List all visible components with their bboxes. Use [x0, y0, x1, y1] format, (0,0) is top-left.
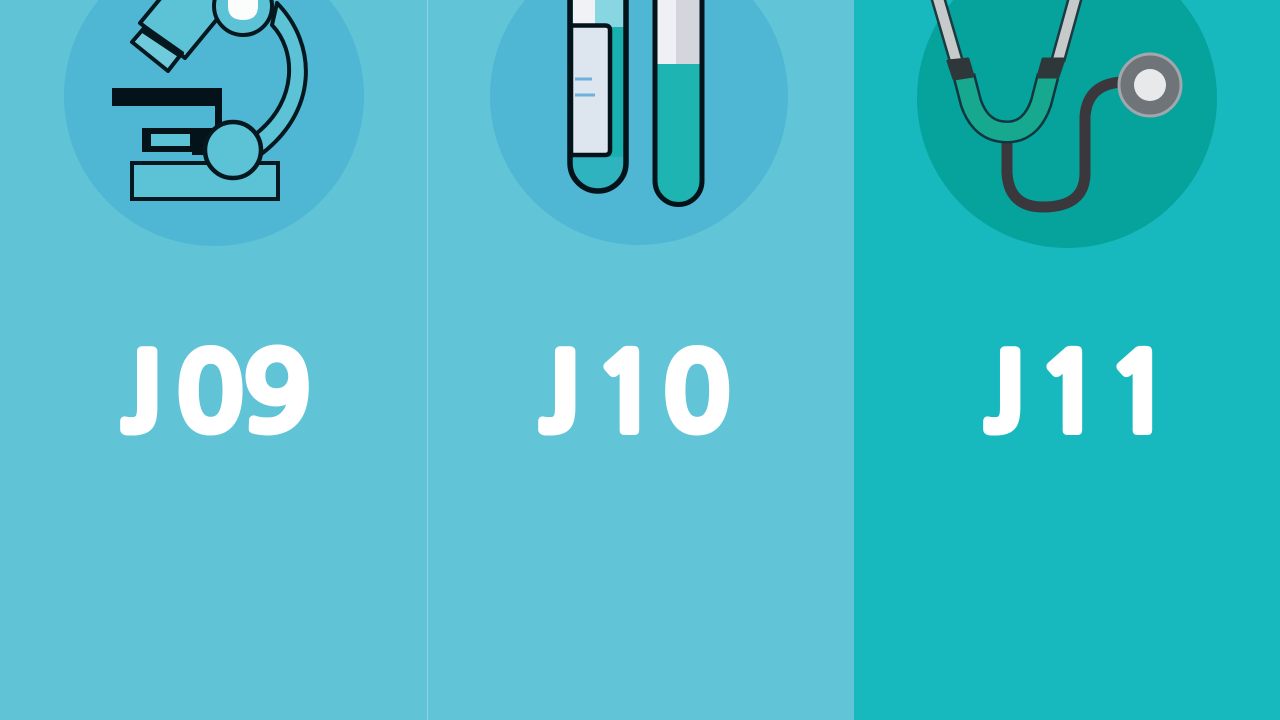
label: J09: J09: [121, 341, 311, 448]
head: [214, 0, 272, 35]
panel: J09: [0, 0, 427, 720]
panel: J11: [854, 0, 1280, 720]
panel: J10: [427, 0, 854, 720]
stage bar: [112, 88, 222, 130]
right tube: [655, 0, 702, 204]
icon: test tubes: [490, 0, 788, 245]
icon: microscope: [64, 0, 364, 246]
objective: [132, 27, 182, 71]
label: J10: J10: [539, 341, 731, 448]
label: J11: J11: [984, 341, 1174, 448]
icon: stethoscope: [917, 0, 1217, 248]
base: [132, 163, 278, 199]
tube: [140, 0, 218, 58]
knob: [205, 122, 261, 178]
stage: [142, 128, 212, 155]
arm: [257, 3, 306, 155]
label strip: [571, 26, 610, 155]
left tube: [570, 0, 626, 191]
